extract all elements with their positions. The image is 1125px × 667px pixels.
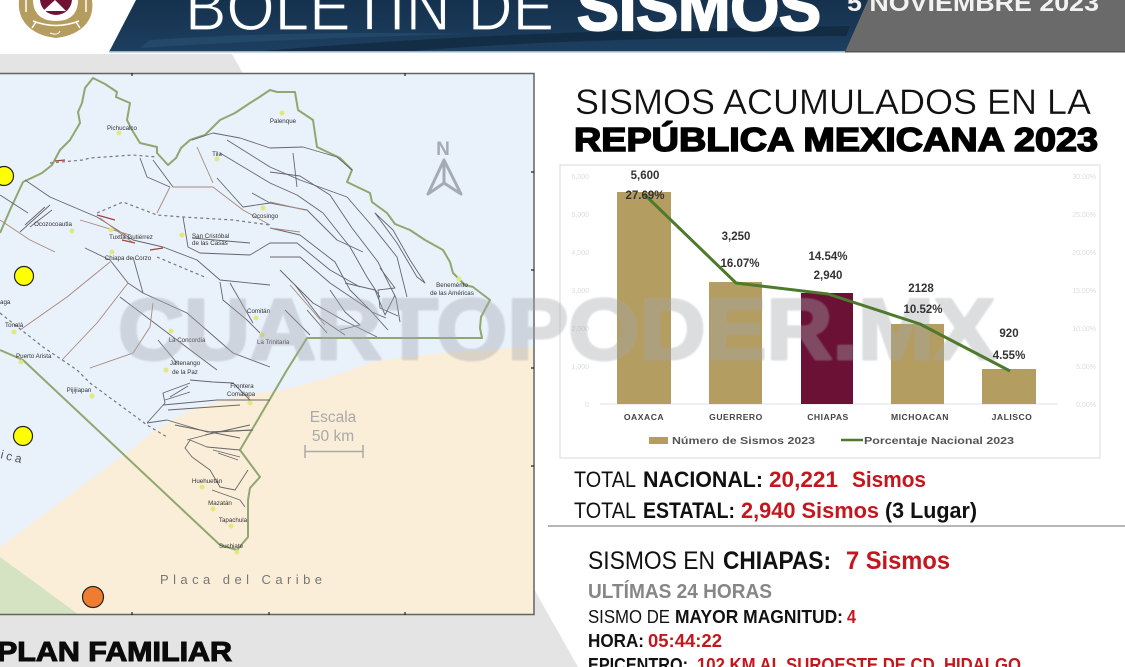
city labels: Tonalá bbox=[5, 322, 24, 329]
chart value labels: 2128 bbox=[908, 283, 934, 295]
watermark: CUARTOPODER.MX bbox=[118, 282, 995, 378]
total nacional: Sismos bbox=[852, 467, 926, 492]
chart value labels: 4.55% bbox=[993, 350, 1025, 362]
epicentro bbox=[588, 654, 1021, 667]
scale: Escala bbox=[310, 409, 357, 426]
category labels bbox=[624, 412, 1032, 422]
sismo de mayor magnitud: 4 bbox=[847, 606, 857, 627]
city labels: de la Paz bbox=[172, 369, 198, 376]
left axis labels: 5,000 bbox=[571, 212, 589, 219]
city labels: Pichucalco bbox=[107, 125, 138, 132]
right axis labels: 10.00% bbox=[1072, 326, 1096, 333]
left axis labels: 1,000 bbox=[571, 364, 589, 371]
icon: north arrow: N bbox=[436, 139, 450, 160]
total estatal bbox=[574, 498, 977, 523]
chart value labels: 3,250 bbox=[722, 231, 750, 243]
chart value labels: 27.69% bbox=[625, 190, 665, 202]
left axis labels: 0 bbox=[585, 402, 589, 409]
chart value labels: 2,940 bbox=[814, 270, 842, 282]
chart legend: Número de Sismos 2023 bbox=[672, 435, 815, 447]
right axis labels: 15.00% bbox=[1072, 288, 1096, 295]
sismos en chiapas bbox=[588, 547, 950, 575]
city markers bbox=[12, 111, 461, 554]
title: boletin de sismos bbox=[185, 0, 821, 44]
ultimas 24 horas: ULTÍMAS 24 HORAS bbox=[588, 580, 772, 603]
sismos en chiapas: CHIAPAS: bbox=[723, 547, 831, 575]
right axis labels: 5.00% bbox=[1076, 364, 1096, 371]
city labels: Ocosingo bbox=[252, 213, 279, 220]
left axis labels: 2,000 bbox=[571, 326, 589, 333]
city labels: La Trinitaria bbox=[257, 339, 290, 346]
chart value labels: 14.54% bbox=[808, 251, 848, 263]
left axis labels: 6,000 bbox=[571, 174, 589, 181]
total nacional: TOTAL bbox=[574, 467, 636, 492]
city labels: Benemérito bbox=[436, 282, 468, 289]
chart value labels: 10.52% bbox=[903, 304, 943, 316]
total estatal: ESTATAL: bbox=[643, 498, 735, 523]
city labels: Tuxtla Gutiérrez bbox=[109, 234, 153, 241]
sismo de mayor magnitud: MAYOR MAGNITUD: bbox=[675, 606, 843, 627]
chart legend bbox=[649, 435, 1014, 447]
heading: sismos acumulados bbox=[574, 83, 1098, 158]
city labels: Ocozocoautla bbox=[34, 221, 72, 228]
category labels: OAXACA bbox=[624, 412, 664, 422]
percentage line bbox=[644, 194, 1010, 371]
city labels: Suchiate bbox=[219, 543, 244, 550]
scale: 50 km bbox=[312, 428, 354, 445]
right axis labels: 0.00% bbox=[1076, 402, 1096, 409]
left axis labels bbox=[571, 174, 589, 409]
category labels: CHIAPAS bbox=[807, 412, 849, 422]
sismos en chiapas: SISMOS EN bbox=[588, 547, 715, 575]
plate label: Placa del Caribe bbox=[160, 572, 322, 587]
total nacional: 20,221 bbox=[769, 467, 838, 492]
hora: 05:44:22 bbox=[648, 630, 722, 651]
city labels: San Cristóbal bbox=[192, 233, 229, 240]
city labels: Frontera bbox=[230, 383, 254, 390]
city labels: La Concordia bbox=[169, 337, 206, 344]
city labels: aga bbox=[0, 299, 11, 306]
left axis labels: 4,000 bbox=[571, 250, 589, 257]
city labels bbox=[0, 118, 474, 550]
chart legend: Porcentaje Nacional 2023 bbox=[864, 435, 1014, 447]
total nacional: NACIONAL: bbox=[643, 467, 763, 492]
total estatal: TOTAL bbox=[574, 498, 636, 523]
caribbean plate area bbox=[0, 347, 534, 614]
scale bbox=[305, 409, 363, 458]
city labels: Jaltenango bbox=[170, 360, 201, 367]
left axis labels: 3,000 bbox=[571, 288, 589, 295]
city labels: Puerto Arista bbox=[16, 353, 52, 360]
right axis labels: 25.00% bbox=[1072, 212, 1096, 219]
chart value labels: 16.07% bbox=[720, 258, 760, 270]
city labels: Tila bbox=[212, 151, 222, 158]
chart: earthquakes by state bbox=[560, 165, 1100, 458]
total estatal: 2,940 Sismos bbox=[741, 498, 879, 523]
sismos en chiapas: 7 Sismos bbox=[846, 547, 950, 575]
city labels: de las Casas bbox=[192, 240, 228, 247]
plate earthquake markers bbox=[0, 166, 104, 608]
hora bbox=[588, 630, 722, 651]
bars bbox=[617, 192, 1036, 404]
city labels: Mazatán bbox=[208, 500, 232, 507]
total estatal: (3 Lugar) bbox=[885, 498, 977, 523]
city labels: Tapachula bbox=[219, 517, 248, 524]
city labels: Pijijiapan bbox=[67, 387, 92, 394]
icon: civil protection logo bbox=[19, 0, 92, 38]
city labels: de las Américas bbox=[430, 290, 474, 297]
heading: sismos acumulados: SISMOS ACUMULADOS EN LA bbox=[575, 83, 1092, 122]
heading: sismos acumulados: REPÚBLICA MEXICANA 2023 bbox=[574, 121, 1098, 158]
city labels: Chiapa de Corzo bbox=[105, 255, 152, 262]
state outline bbox=[0, 78, 490, 550]
right axis labels: 30.00% bbox=[1072, 174, 1096, 181]
category labels: JALISCO bbox=[992, 412, 1032, 422]
sismo de mayor magnitud: SISMO DE bbox=[588, 606, 670, 627]
cocos plate area bbox=[0, 557, 78, 614]
right axis labels bbox=[1072, 174, 1096, 409]
total nacional bbox=[574, 467, 926, 492]
hora: HORA: bbox=[588, 630, 644, 651]
panel: seismic map of Chiapas bbox=[0, 73, 534, 615]
chart value labels: 920 bbox=[999, 328, 1019, 340]
city labels: Palenque bbox=[270, 118, 297, 125]
fault lines bbox=[0, 133, 425, 507]
city labels: Comalapa bbox=[227, 391, 256, 398]
background gray panel bbox=[0, 54, 578, 667]
right axis labels: 20.00% bbox=[1072, 250, 1096, 257]
chart value labels: 5,600 bbox=[631, 170, 659, 182]
chart value labels bbox=[625, 170, 1025, 362]
sismo de mayor magnitud bbox=[588, 606, 857, 627]
category labels: GUERRERO bbox=[709, 412, 763, 422]
header banner bbox=[109, 0, 1125, 52]
map frame bbox=[0, 74, 534, 614]
city labels: Huehuetán bbox=[192, 478, 223, 485]
city labels: ica bbox=[0, 447, 26, 467]
heading: plan familiar: PLAN FAMILIAR bbox=[0, 636, 232, 667]
category labels: MICHOACAN bbox=[891, 412, 949, 422]
icon: north arrow bbox=[428, 139, 461, 194]
city labels: Comitán bbox=[247, 308, 271, 315]
